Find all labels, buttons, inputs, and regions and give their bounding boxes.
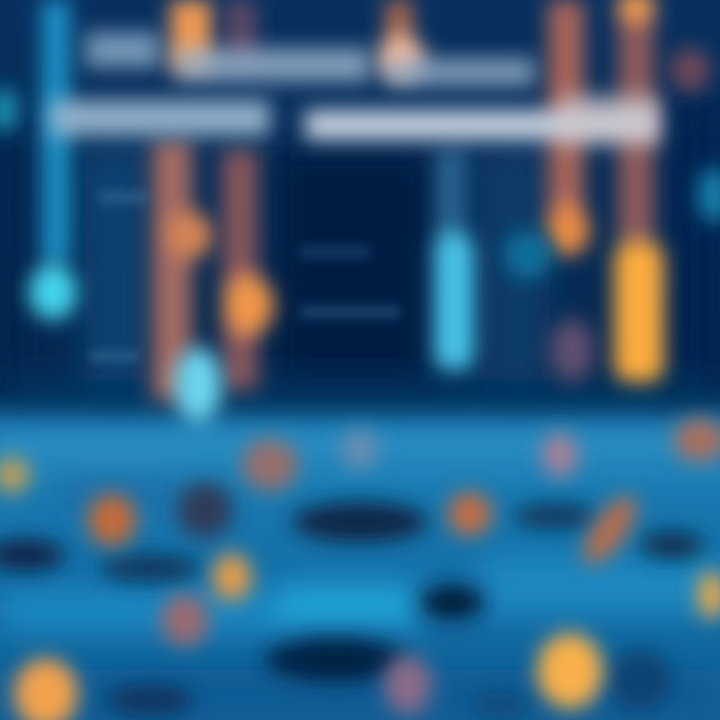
- bar: light blue base: [174, 347, 222, 423]
- bar: right orange: [614, 0, 664, 382]
- warm blobs in lower field: [0, 418, 720, 715]
- vertical bars: [29, 0, 664, 423]
- bar: right salmon: [546, 0, 594, 382]
- heading: blurred title line two: [50, 95, 660, 145]
- bar: center top: [377, 0, 425, 80]
- glowing orange circle: bottom left: [14, 658, 78, 720]
- panel: lower blue field: [0, 425, 720, 720]
- bar: left cyan: [29, 0, 77, 320]
- heading: blurred title line one: [85, 32, 535, 86]
- glow: teal side spots: [0, 48, 720, 279]
- text block: centre column: [300, 245, 400, 319]
- dark blobs in lower field: [0, 482, 704, 717]
- bar: salmon second: [222, 0, 274, 390]
- bar: salmon left: [152, 0, 214, 400]
- panel: upper dark columns: [0, 100, 720, 410]
- glowing orange circle: bottom right: [537, 633, 603, 709]
- bar: center blue: [434, 150, 474, 370]
- text block: left column: [90, 190, 148, 362]
